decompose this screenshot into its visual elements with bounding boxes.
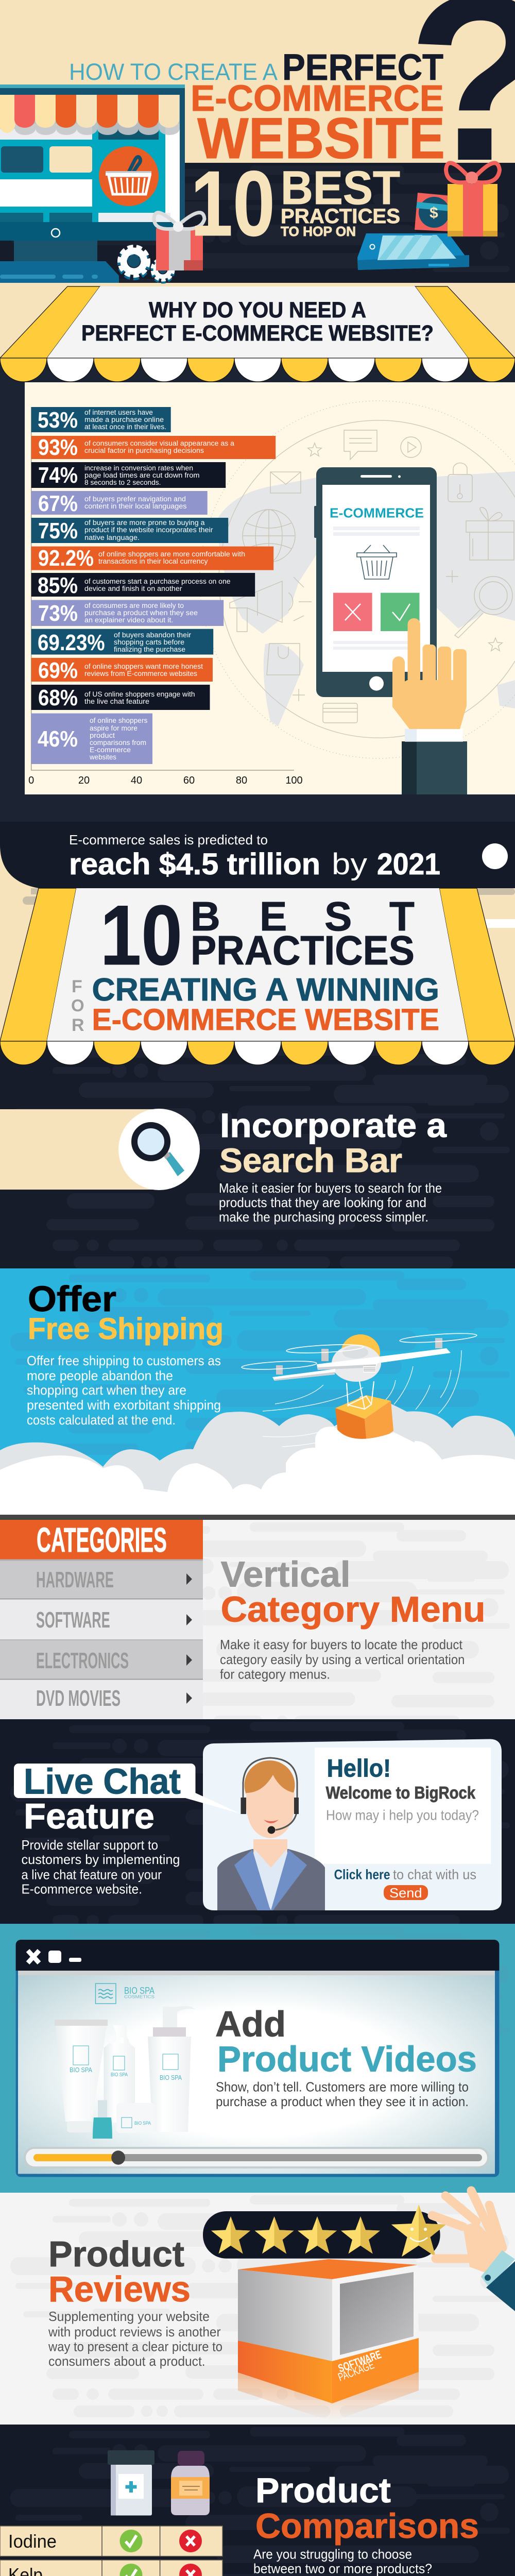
bar: 46%: E-commerce (90, 746, 131, 754)
text block (219, 1180, 442, 1225)
icon: hand holding star (432, 2191, 515, 2311)
icon: tablet (357, 233, 469, 270)
bar: 75% (31, 518, 228, 544)
heading (255, 2471, 479, 2546)
heading: live chat bubble: Live Chat (24, 1761, 181, 1802)
logo: bio spa: BIO SPA (124, 1986, 154, 1996)
header panel (0, 0, 515, 396)
bar: 92.2%: of online shoppers are more comfortable with (98, 550, 245, 558)
panel: search bar (0, 1041, 515, 1268)
bar: 73% (31, 600, 224, 626)
bar: 74%: 8 seconds to 2 seconds. (84, 479, 161, 486)
chat window: Hello! (327, 1755, 391, 1783)
panel: product reviews (0, 2191, 515, 2425)
icon: cosmetic products: BIO SPA (111, 2072, 128, 2078)
bar: 68%: 68% (38, 685, 78, 710)
text block: Supplementing your website (48, 2309, 210, 2324)
heading (81, 298, 434, 346)
text block: Make it easy for buyers to locate the product (220, 1637, 463, 1652)
heading: Product (255, 2471, 391, 2510)
bar: 53%: of internet users have (84, 409, 153, 416)
axis labels: 80 (236, 775, 247, 786)
bar: 73%: an explainer video about it. (84, 616, 173, 624)
axis labels: 60 (183, 775, 195, 786)
text block: way to present a clear picture to (48, 2338, 222, 2354)
star rating (203, 2205, 446, 2259)
bar: 85% (31, 573, 255, 598)
icon: cosmetic products: BIO SPA (134, 2121, 151, 2126)
heading (48, 2234, 191, 2309)
text block (253, 2546, 436, 2576)
bar: 74%: page load times are cut down from (84, 471, 200, 479)
axis labels: 20 (78, 775, 90, 786)
bar: 75%: native language. (84, 534, 140, 541)
subtitle: 10 best practices: TO HOP ON (281, 224, 356, 239)
bar: 46% (31, 714, 152, 764)
chat window: Send (389, 1885, 422, 1901)
text block (22, 1837, 180, 1897)
heading (28, 1279, 224, 1346)
bar: 69.23% (31, 629, 213, 655)
heading: Comparisons (255, 2506, 479, 2546)
icon: cosmetic products (55, 2006, 195, 2139)
bar: 46%: product (90, 732, 115, 739)
icon: software box (238, 2259, 419, 2421)
panel: product comparisons (0, 2425, 515, 2576)
icon: cosmetic products: BIO SPA (160, 2074, 182, 2081)
bar: 92.2%: 92.2% (38, 546, 94, 571)
bar: 85%: 85% (38, 573, 78, 598)
bar: 69%: 69% (38, 658, 78, 683)
text block (220, 1637, 465, 1682)
bar: 46%: websites (89, 753, 116, 761)
text block: costs calculated at the end. (27, 1412, 176, 1428)
subtitle: 10 best practices (191, 152, 400, 256)
panel: why you need (0, 286, 515, 826)
heading: Add (215, 2004, 286, 2044)
bar: 69%: of online shoppers want more honest (84, 663, 203, 670)
text block: purchase a product when they see it in action. (216, 2094, 469, 2109)
logo: bio spa: COSMETICS (124, 1995, 154, 1999)
text block (27, 1353, 221, 1428)
comparison table (0, 2526, 222, 2576)
comparison table: Iodine (8, 2531, 57, 2552)
bar: 74%: increase in conversion rates when (84, 464, 193, 472)
axis labels: 0 (28, 775, 34, 786)
bar: 53%: at least once in their lives. (84, 423, 166, 431)
subtitle: 10 best practices: PRACTICES (281, 205, 400, 228)
icon: magnifier (0, 1109, 200, 1190)
bar: 68%: of US online shoppers engage with (84, 690, 195, 698)
bar: 93%: of consumers consider visual appearance as a (84, 439, 235, 447)
bar: 74%: 74% (38, 463, 78, 488)
bar: 85%: device and finish it on another (84, 585, 182, 592)
text block: consumers about a product. (48, 2353, 205, 2369)
icon: right bottle (171, 2451, 210, 2515)
panel: live chat (0, 1719, 515, 1944)
bar: 69.23%: finalizing the purchase (114, 646, 185, 653)
panel: product videos (0, 1924, 515, 2193)
heading: Search Bar (219, 1141, 402, 1179)
progress bar (25, 2148, 488, 2167)
axis labels (28, 775, 303, 786)
heading: Incorporate a (220, 1106, 447, 1144)
chat window: Click here (334, 1867, 390, 1882)
heading: 10 best practices: R (72, 1015, 84, 1035)
category menu: CATEGORIES (37, 1521, 167, 1560)
axis labels: 40 (131, 775, 142, 786)
panel: vertical category menu (0, 1515, 515, 1744)
sign: sales prediction: reach $4.5 trillion (69, 848, 320, 881)
bar: 53%: 53% (38, 408, 78, 433)
title (69, 47, 445, 171)
bar: 67%: content in their local languages (84, 502, 187, 510)
bar: 68% (31, 685, 210, 710)
icon: coral gift (154, 213, 204, 270)
heading: 10 best practices: F (72, 977, 82, 996)
text block (216, 2079, 469, 2109)
bar: 69% (31, 658, 213, 683)
bar: 74% (31, 462, 226, 488)
text block: presented with exorbitant shipping (27, 1397, 221, 1413)
bar: 93%: 93% (38, 435, 78, 460)
axis labels: 100 (285, 775, 303, 786)
heading (221, 1554, 486, 1629)
chat window: How may i help you today? (326, 1807, 479, 1823)
heading: PERFECT E-COMMERCE WEBSITE? (81, 321, 434, 346)
heading: 10 best practices: O (71, 996, 84, 1015)
category menu: SOFTWARE (36, 1607, 110, 1633)
text block: customers by implementing (22, 1852, 180, 1867)
heading: live chat bubble (14, 1761, 240, 1836)
icon: drone delivery (242, 1332, 477, 1450)
bar: 93% (31, 435, 276, 460)
awning: best practices (0, 888, 515, 1041)
category menu: DVD MOVIES (36, 1686, 121, 1711)
bar: 92.2%: transactions in their local currency (98, 557, 208, 565)
clouds front (0, 1427, 515, 1515)
icon: phone: E-COMMERCE (330, 505, 424, 520)
text block: category easily by using a vertical orientation (220, 1652, 465, 1667)
title: PERFECT (282, 47, 443, 88)
bar: 67% (31, 491, 208, 516)
sign: sales prediction: E-commerce sales is predicted to (69, 832, 268, 848)
icon: basket badge (99, 146, 159, 206)
heading: 10 best practices: E-COMMERCE WEBSITE (92, 1003, 439, 1037)
text block: for category menus. (220, 1667, 330, 1682)
bar: 69.23%: shopping carts before (114, 638, 184, 646)
sign: sales prediction (0, 822, 515, 888)
bar: 67%: of buyers prefer navigation and (84, 495, 186, 503)
text block: a live chat feature on your (22, 1867, 162, 1882)
bar chart (28, 407, 303, 786)
heading: 10 best practices: PRACTICES (191, 927, 415, 973)
icon: phone (314, 467, 437, 697)
heading: WHY DO YOU NEED A (149, 298, 366, 323)
heading: Offer (28, 1279, 116, 1319)
text block: between two or more products? (253, 2561, 432, 2576)
heading: Product (48, 2234, 184, 2274)
text block: products that they are looking for and (219, 1195, 426, 1210)
text block: Make it easier for buyers to search for the (219, 1180, 442, 1196)
text block: make the purchasing process simpler. (219, 1209, 428, 1225)
icon: software box: PACKAGE (336, 2358, 376, 2384)
category menu: HARDWARE (36, 1567, 114, 1592)
icon: gears (122, 249, 171, 280)
chat window (203, 1739, 502, 1910)
icon: shop monitor (0, 84, 185, 283)
video window (16, 1940, 499, 2177)
panel: 10 best practices banner (0, 822, 515, 1043)
text block: with product reviews is another (48, 2324, 221, 2340)
text block: Offer free shipping to customers as (27, 1353, 221, 1368)
title: E-COMMERCE (191, 78, 444, 119)
heading: live chat bubble: Feature (24, 1796, 154, 1836)
heading: product videos: Product Videos (217, 2039, 477, 2079)
bar: 69%: reviews from E-commerce websites (84, 670, 197, 677)
bar: 92.2% (31, 546, 273, 571)
text block: more people abandon the (27, 1368, 173, 1383)
heading: 10 best practices (71, 888, 439, 1037)
bar: 73%: of consumers are more likely to (84, 602, 184, 609)
text block: Provide stellar support to (22, 1837, 158, 1853)
heading: Vertical (221, 1554, 351, 1595)
bar: 75%: 75% (38, 518, 78, 544)
heading: Category Menu (221, 1589, 486, 1629)
chat window: to chat with us (393, 1867, 476, 1882)
sign: sales prediction: 2021 (377, 848, 440, 881)
bar: 46%: comparisons from (90, 739, 146, 747)
heading: Reviews (48, 2269, 191, 2309)
category menu (0, 1520, 203, 1719)
icon: pointing hand (392, 618, 467, 794)
text block: shopping cart when they are (27, 1382, 186, 1398)
bar: 73%: purchase a product when they see (84, 609, 198, 617)
icon: software box: SOFTWARE (336, 2348, 383, 2375)
bar: 75%: product if the website incorporates their (84, 526, 213, 534)
heading (219, 1106, 447, 1179)
heading: 10 best practices: CREATING A WINNING (92, 972, 439, 1008)
clouds back (0, 1396, 515, 1515)
awning (0, 286, 515, 382)
bar: 69.23%: of buyers abandon their (114, 631, 192, 639)
bar: 69.23%: 69.23% (38, 630, 105, 655)
bar: 85%: of customers start a purchase process on one (84, 578, 231, 585)
subtitle: 10 best practices: 10 (191, 152, 275, 256)
text block: Show, don’t tell. Customers are more willing to (216, 2079, 469, 2095)
bar: 46%: 46% (38, 726, 78, 752)
icon: support agent (217, 1758, 325, 1910)
world map background (200, 401, 515, 758)
panel: free shipping (0, 1268, 515, 1515)
subtitle: 10 best practices: BEST (281, 162, 400, 214)
bar: 46%: aspire for more (90, 724, 138, 732)
chat window: Welcome to BigRock (326, 1783, 476, 1802)
sign: sales prediction: by (332, 848, 367, 881)
text block: Are you struggling to choose (253, 2546, 412, 2562)
icon: cosmetic products: BIO SPA (70, 2066, 92, 2074)
logo: bio spa (96, 1984, 154, 2004)
category menu: ELECTRONICS (36, 1648, 129, 1673)
heading: 10 best practices: BEST (191, 893, 415, 939)
bar: 93%: crucial factor in purchasing decisions (84, 447, 204, 454)
icon: credit card coin: $ (430, 205, 438, 222)
bar: 67%: 67% (38, 491, 78, 516)
icon: credit card coin (415, 193, 451, 231)
title: HOW TO CREATE A (69, 59, 278, 85)
bar: 73%: 73% (38, 601, 78, 626)
text block: E-commerce website. (22, 1882, 142, 1897)
title: WEBSITE (197, 106, 445, 171)
icon: yellow gift (446, 163, 500, 236)
heading: 10 best practices: 10 (100, 888, 182, 982)
bar: 53%: made a purchase online (84, 416, 164, 423)
bar: 46%: of online shoppers (90, 717, 148, 724)
text block (48, 2309, 222, 2369)
bar: 53% (31, 407, 171, 433)
icon: left bottle (108, 2450, 154, 2515)
heading: Free Shipping (28, 1312, 224, 1346)
bar: 68%: the live chat feature (84, 698, 149, 705)
bar: 75%: of buyers are more prone to buying a (84, 519, 205, 527)
